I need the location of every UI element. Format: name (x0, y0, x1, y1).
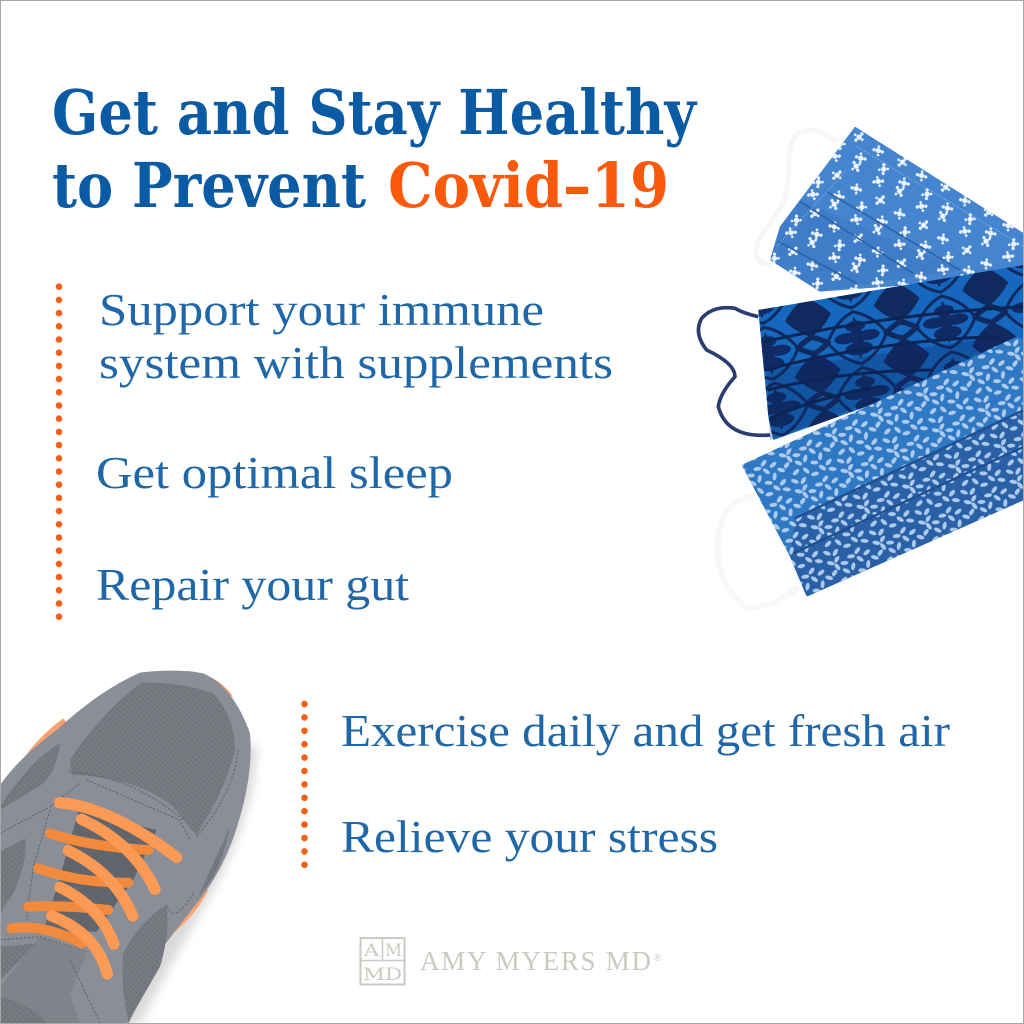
toe mesh panel (70, 683, 235, 835)
blue leaf-print mask (742, 337, 1024, 597)
logo monogram box: A (363, 941, 380, 961)
text block: upper health tips: Get optimal sleep (96, 447, 453, 498)
text block: lower health tips: Relieve your stress (341, 811, 718, 862)
white ear loop: leaf mask (718, 497, 798, 608)
logo monogram box (360, 938, 404, 985)
side mesh panel (0, 743, 60, 810)
soft shoe shadow (100, 743, 257, 1024)
title: Covid–19 (388, 149, 669, 222)
tongue opening (43, 812, 157, 932)
registered mark: ® (654, 953, 662, 964)
text block: lower health tips (341, 705, 950, 862)
logo monogram box: M (385, 941, 402, 961)
title: Get and Stay Healthy (52, 76, 698, 149)
title: to Prevent (52, 149, 366, 222)
dotted divider: lower list (301, 704, 308, 868)
text block: upper health tips (96, 284, 613, 610)
toe bottom mesh (0, 997, 48, 1024)
logo wordmark: AMY MYERS MD (420, 946, 651, 976)
shoe upper (0, 671, 251, 1024)
navy damask mask (758, 265, 1024, 440)
lower tongue (0, 937, 87, 1024)
navy elastic ear loop (698, 308, 770, 435)
white ear loop: light mask (756, 130, 837, 267)
title (52, 76, 698, 222)
photo: three fabric face masks (698, 127, 1024, 608)
orange laces (12, 803, 177, 974)
text block: lower health tips: Exercise daily and get fresh air (341, 705, 950, 756)
text block: upper health tips: Repair your gut (96, 559, 409, 610)
right side mesh panel (197, 827, 230, 900)
mesh lower left panel (0, 943, 37, 980)
photo: grey running shoe with orange laces (0, 671, 257, 1024)
text block: upper health tips: system with supplements (99, 337, 613, 388)
logo monogram box: MD (363, 965, 402, 985)
logo: Amy Myers MD (360, 938, 662, 985)
dotted divider: upper list (56, 287, 62, 618)
text block: upper health tips: Support your immune (99, 284, 544, 335)
stitching details (0, 750, 238, 1023)
orange sole edge (0, 671, 233, 932)
right lower mesh panel (122, 905, 167, 1022)
light blue floral mask (770, 127, 1024, 292)
left eyelet mesh panel (0, 838, 26, 913)
